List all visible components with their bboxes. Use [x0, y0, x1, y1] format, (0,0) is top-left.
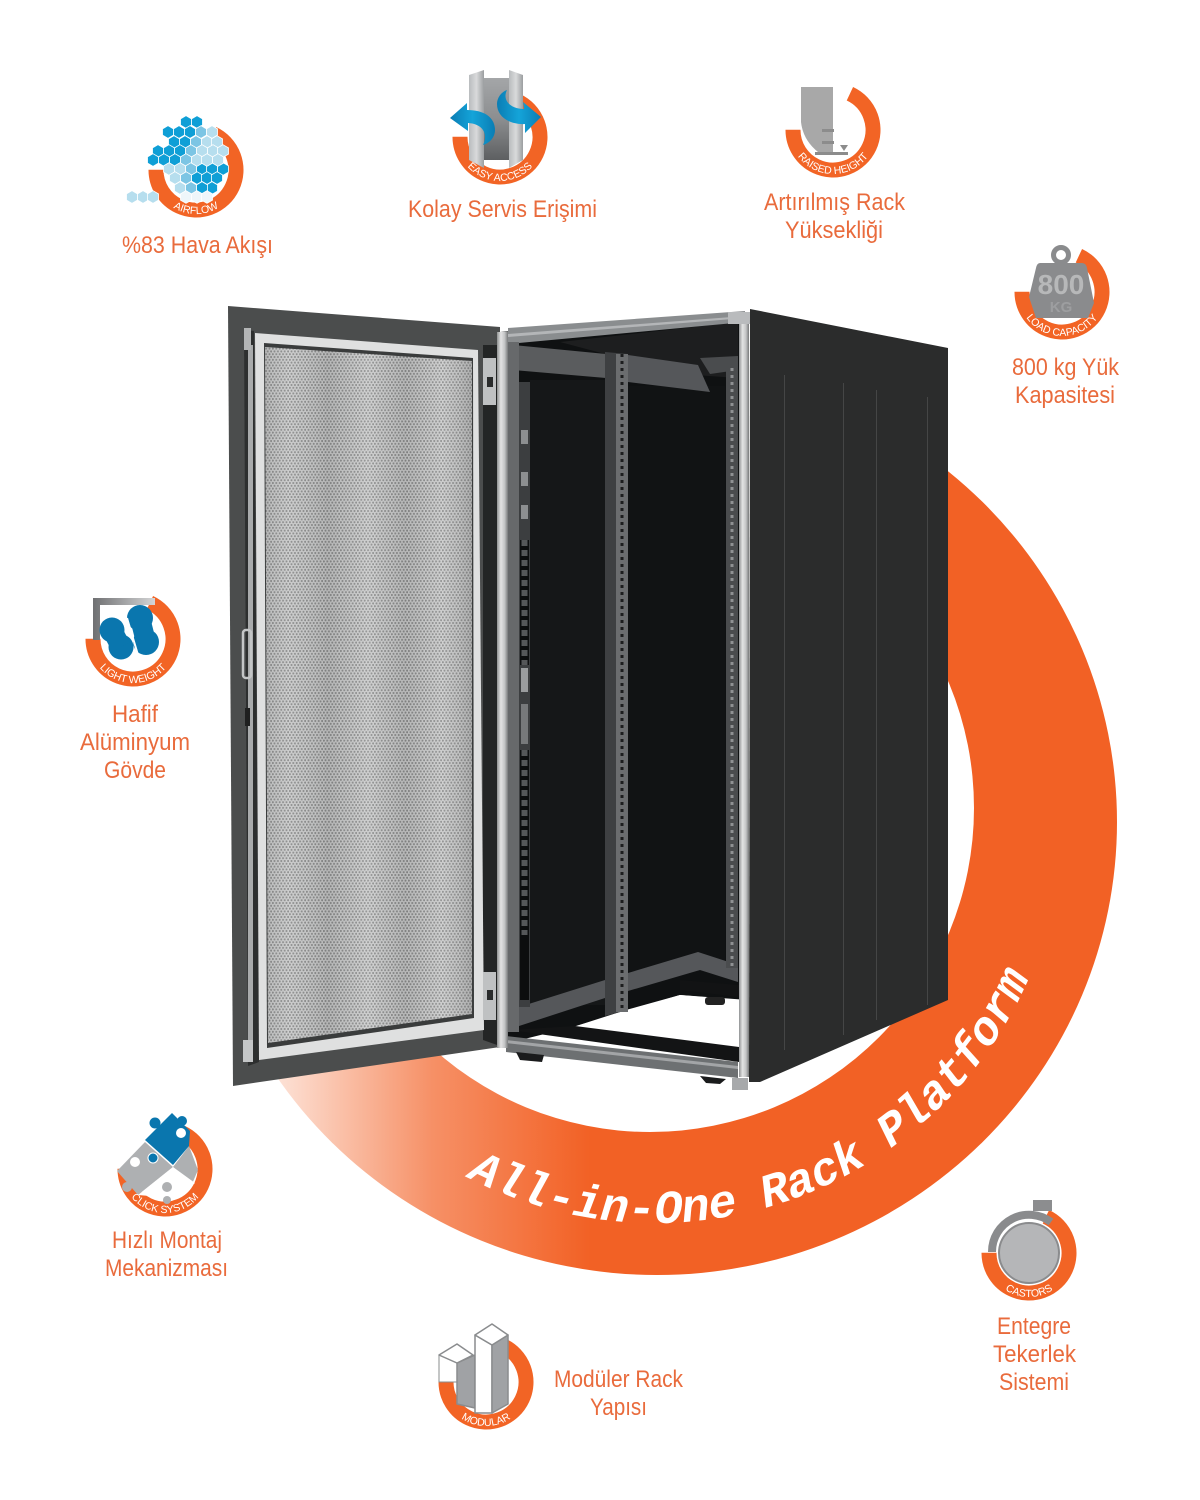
airflow orange ring: [143, 117, 249, 223]
light weight aluminium profile icon: [93, 598, 159, 660]
rack side panel: [749, 309, 948, 1082]
modular caption: Yapısı: [590, 1394, 647, 1421]
top interior and upper beams: [508, 311, 745, 392]
raised height ring label: RAISED HEIGHT: [798, 152, 866, 174]
load capacity weight icon: KG: [1050, 299, 1072, 316]
feature: airflow: [122, 116, 273, 259]
feature: easy access: [408, 70, 597, 223]
castors orange ring: [976, 1200, 1082, 1306]
load capacity caption: [1012, 354, 1120, 409]
castors caption: Entegre: [997, 1313, 1071, 1340]
power distribution strip: [519, 382, 530, 1007]
modular caption: Modüler Rack: [554, 1366, 684, 1393]
click system ring label: CLICK SYSTEM: [132, 1192, 198, 1214]
airflow caption: %83 Hava Akışı: [122, 232, 273, 259]
light weight ring label: LIGHT WEIGHT: [100, 662, 165, 684]
ring caption: All-in-One Rack Platform: All-in-One Rack Platform: [464, 967, 1028, 1224]
load capacity ring label: LOAD CAPACITY: [1026, 313, 1096, 336]
easy access caption: Kolay Servis Erişimi: [408, 196, 597, 223]
modular ring label: MODULAR: [462, 1412, 510, 1426]
raised height caption: Artırılmış Rack: [764, 189, 906, 216]
click system orange ring: [112, 1116, 218, 1222]
load capacity caption: 800 kg Yük: [1012, 354, 1120, 381]
easy access orange ring: [447, 84, 553, 190]
rack interior: [500, 312, 748, 1045]
open rack door: [228, 306, 500, 1086]
door locking rod and handle: [243, 328, 253, 1062]
raised height caption: Yüksekliği: [785, 217, 883, 244]
modular building blocks icon: [439, 1324, 508, 1413]
easy access blue arrows: [450, 90, 541, 145]
feature: load capacity: [1012, 245, 1120, 409]
white floor gap: [573, 995, 739, 1047]
click system puzzle icon: [117, 1113, 198, 1204]
raised height orange ring: [780, 77, 886, 183]
feature: castors: [982, 1200, 1077, 1396]
rear lower frame: [516, 952, 739, 1027]
castors ring label: CASTORS: [1006, 1284, 1052, 1297]
middle vertical post: [605, 352, 628, 1016]
raised height rack column icon: [801, 87, 848, 155]
easy access open door icon: [469, 70, 523, 168]
door hinges: [483, 358, 496, 1020]
big orange ring band: [278, 471, 1117, 1275]
modular caption: [554, 1366, 684, 1421]
load capacity caption: Kapasitesi: [1015, 382, 1115, 409]
light weight caption: Hafif: [112, 701, 158, 728]
feature: click system: [105, 1113, 228, 1282]
feature: raised height: [764, 87, 906, 244]
raised height caption: [764, 189, 906, 244]
castors wheel icon: [992, 1200, 1059, 1283]
easy access ring label: EASY ACCESS: [468, 162, 532, 182]
right front post: [739, 322, 749, 1077]
load capacity weight icon: [1029, 248, 1094, 318]
light weight caption: [80, 701, 190, 784]
left front post: [497, 332, 519, 1048]
front bottom beam and feet: [506, 1026, 748, 1090]
light weight caption: Gövde: [104, 757, 166, 784]
airflow ring label: AIRFLOW: [173, 201, 217, 214]
light weight orange ring: [80, 586, 186, 692]
modular orange ring: [433, 1329, 539, 1435]
click system caption: Hızlı Montaj: [112, 1227, 222, 1254]
load capacity weight icon: 800: [1038, 269, 1084, 300]
load capacity orange ring: [1009, 239, 1115, 345]
airflow hexagon cluster: [126, 116, 228, 203]
feature: modular: [438, 1323, 684, 1430]
castors caption: Tekerlek: [993, 1341, 1077, 1368]
feature: light weight: [80, 596, 190, 784]
rack cabinet: [497, 309, 948, 1090]
click system caption: [105, 1227, 228, 1282]
click system caption: Mekanizması: [105, 1255, 228, 1282]
rear right rail: [726, 368, 738, 968]
castors caption: Sistemi: [999, 1369, 1069, 1396]
corner bracket: [728, 312, 750, 324]
castors caption: [993, 1313, 1077, 1396]
light weight caption: Alüminyum: [80, 729, 190, 756]
door perforated mesh: [265, 347, 472, 1043]
